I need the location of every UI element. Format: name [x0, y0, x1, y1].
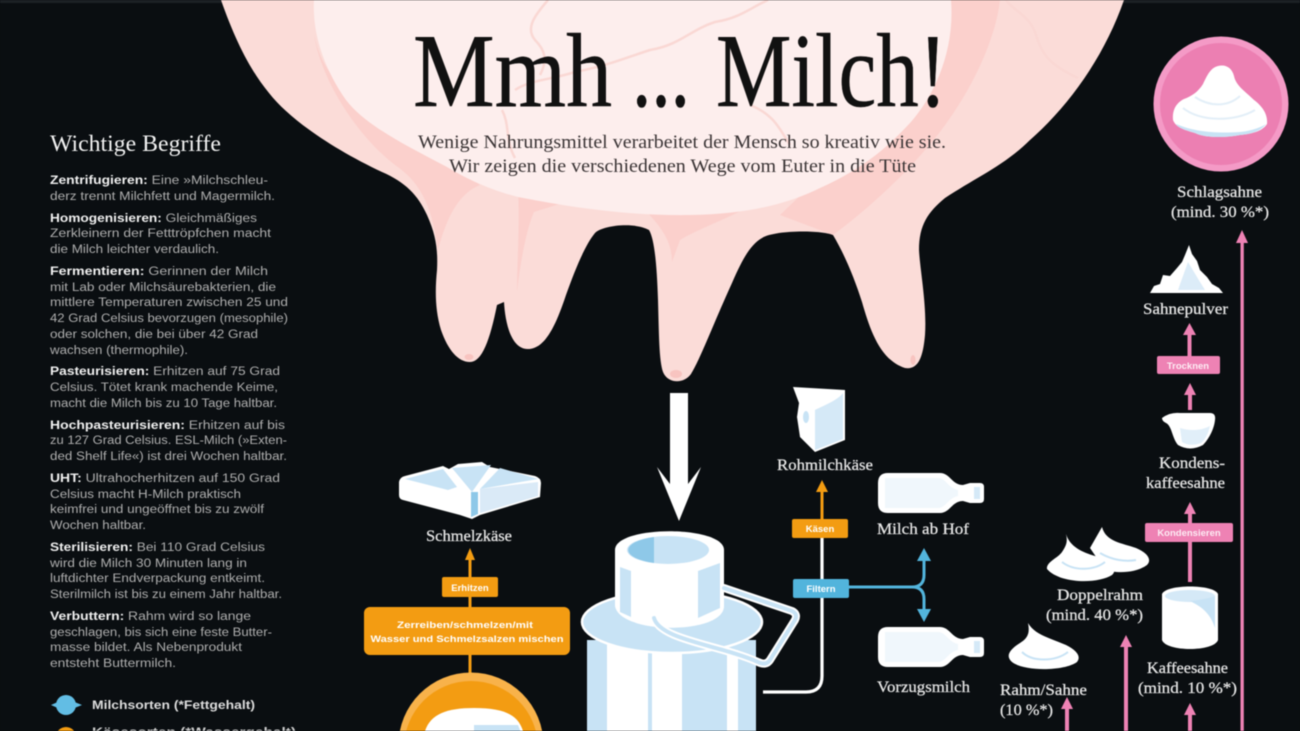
term: UHT: Wochen haltbar.: [50, 520, 146, 532]
subtitle: [418, 132, 946, 177]
icon: whipped cream: [1173, 65, 1267, 137]
term: Fermentieren: Fermentieren: Gerinnen der Milch: [50, 266, 268, 278]
icon: raw milk cheese: [793, 387, 845, 452]
step: Trocknen: [1157, 356, 1220, 374]
arrow: to Rahm/Sahne: [1061, 697, 1073, 731]
milk process: Filtern: [793, 548, 931, 622]
term: Hochpasteurisieren: Hochpasteurisieren: Erhitzen auf bis: [50, 420, 285, 432]
arrow: Kondensieren: [1184, 502, 1196, 582]
step: Käsen: Käsen: [806, 524, 834, 535]
term: Zentrifugieren: Zentrifugieren: Eine »Milchschleu-: [50, 175, 268, 187]
udder veins: [502, 0, 1078, 158]
title: [413, 12, 947, 129]
label: Rahm/Sahne: (10 %*): [1000, 702, 1053, 719]
label: Doppelrahm: [1046, 587, 1143, 624]
can handle: [654, 588, 796, 664]
label: Milch ab Hof: Milch ab Hof: [877, 521, 970, 538]
term: Verbuttern: entsteht Buttermilch.: [50, 658, 176, 670]
term: UHT: Celsius macht H-Milch praktisch: [50, 489, 241, 501]
term: Verbuttern: geschlagen, bis sich eine feste Butter-: [50, 627, 272, 639]
label: Rahm/Sahne: [1000, 682, 1087, 719]
term: Fermentieren: mittlere Temperaturen zwischen 25 und: [50, 297, 288, 309]
arrow: to Kaffeesahne: [1184, 703, 1196, 731]
term: Zentrifugieren: derz trennt Milchfett und Magermilch.: [50, 191, 275, 203]
icon: cream dollop: [1009, 623, 1079, 669]
icon: double cream: [1047, 527, 1149, 581]
can neck: [615, 531, 724, 628]
milk pipe: [763, 537, 822, 692]
can body: [587, 640, 756, 731]
term: Fermentieren: [49, 266, 288, 357]
term: Hochpasteurisieren: zu 127 Grad Celsius. ESL-Milch (»Exten-: [50, 435, 287, 447]
term: Pasteurisieren: Celsius. Tötet krank machende Keime,: [50, 382, 278, 394]
arrow: from udder to milk can: [657, 393, 701, 521]
term: Sterilisieren: [49, 542, 282, 601]
step: Erhitzen: [442, 577, 498, 597]
term: UHT: keimfrei und ungeöffnet bis zu zwölf: [50, 504, 265, 516]
step: Kondensieren: Kondensieren: [1157, 528, 1221, 539]
legend icon: milk types: [51, 695, 82, 715]
term: Homogenisieren: [50, 213, 272, 256]
milk bottle: Milch ab Hof: [877, 473, 984, 538]
icon: bottle: [878, 473, 984, 513]
title: ...: [632, 12, 690, 129]
cheese process: Schmelzkäse: [364, 462, 570, 731]
term: Sterilisieren: Sterilisieren: Bei 110 Grad Celsius: [50, 542, 265, 554]
udder shading bands: [314, 0, 1000, 292]
label: Rohmilchkäse: Rohmilchkäse: [777, 457, 873, 474]
label: Kaffeesahne: (mind. 10 %*): [1138, 680, 1237, 697]
term: Homogenisieren: Zerkleinern der Fetttröpfchen macht: [50, 228, 272, 240]
arrow: to Trocknen: [1184, 383, 1196, 410]
label: Kondenskaffeesahne: kaffeesahne: [1146, 475, 1225, 492]
label: Doppelrahm: (mind. 40 %*): [1046, 607, 1143, 624]
step: Zerreiben: Zerreiben/schmelzen/mit: [397, 620, 534, 631]
label: Vorzugsmilch: Vorzugsmilch: [877, 679, 970, 696]
step: Käsen: [792, 519, 848, 538]
can shoulder: [582, 591, 762, 653]
icon: bottle: [878, 627, 984, 667]
icon: cream powder: [1150, 245, 1223, 293]
badge: cheese circle: [398, 672, 544, 731]
label: Schlagsahne: [1171, 184, 1269, 221]
term: Fermentieren: wachsen (thermophile).: [49, 345, 188, 357]
legend: [51, 695, 296, 731]
term: Verbuttern: [50, 611, 272, 670]
icon: condensed cream cup: [1162, 413, 1215, 448]
subtitle: Wir zeigen die verschiedenen Wege vom Euter in die Tüte: [449, 156, 916, 177]
pink arrow: long to Schlagsahne: [1236, 230, 1248, 731]
step: Zerreiben: [364, 607, 570, 655]
panel: glossary: [49, 131, 288, 670]
label: Doppelrahm: Doppelrahm: [1057, 587, 1143, 604]
label: Sahnepulver: Sahnepulver: [1143, 301, 1229, 318]
term: Hochpasteurisieren: [50, 420, 287, 463]
term: UHT: [50, 473, 280, 532]
legend label: milk types: Milchsorten (*Fettgehalt): [92, 700, 255, 712]
arrow: Käsen up: [816, 480, 828, 520]
term: Pasteurisieren: [50, 366, 280, 410]
cheese process: Rohmilchkäse: [777, 387, 873, 538]
term: Verbuttern: masse bildet. Als Nebenprodukt: [50, 642, 243, 654]
term: Sterilisieren: luftdichter Endverpackung entkeimt.: [50, 573, 265, 585]
label: Schlagsahne: (mind. 30 %*): [1171, 204, 1269, 221]
milk can: [582, 531, 796, 731]
title: Milch!: [716, 12, 947, 129]
term: UHT: UHT: Ultrahocherhitzen auf 150 Grad: [50, 473, 280, 485]
term: Fermentieren: mit Lab oder Milchsäurebakterien, die: [50, 282, 276, 294]
step: Zerreiben: Wasser und Schmelzsalzen mischen: [370, 634, 564, 645]
term: Fermentieren: oder solchen, die bei über 42 Grad: [50, 329, 258, 341]
arrow: to Doppelrahm: [1120, 635, 1132, 731]
term: Verbuttern: Verbuttern: Rahm wird so lange: [50, 611, 251, 623]
term: Pasteurisieren: macht die Milch bis zu 10 Tage haltbar.: [50, 398, 277, 410]
term: Zentrifugieren: [50, 175, 275, 203]
step: Erhitzen: Erhitzen: [451, 583, 489, 594]
udder illustration: [221, 0, 1124, 381]
label: Kondenskaffeesahne: Kondens-: [1159, 455, 1225, 472]
legend icon: cheese types: [56, 727, 76, 731]
term: Sterilisieren: Sterilmilch ist bis zu einem Jahr haltbar.: [50, 589, 282, 601]
term: Homogenisieren: Homogenisieren: Gleichmäßiges: [50, 213, 257, 225]
glossary heading: Wichtige Begriffe: [50, 131, 221, 156]
teat tips: [464, 354, 916, 378]
icon: coffee cream container: [1162, 586, 1218, 649]
blue branch arrows: [848, 548, 931, 622]
title: Mmh: [413, 12, 612, 129]
arrow: to Sahnepulver: [1183, 323, 1196, 356]
label: Kaffeesahne: [1138, 660, 1237, 697]
label: Schlagsahne: Schlagsahne: [1177, 184, 1262, 201]
term: Fermentieren: 42 Grad Celsius bevorzugen (mesophile): [50, 313, 288, 325]
term: Sterilisieren: wird die Milch 30 Minuten lang in: [49, 558, 247, 570]
icon: processed cheese wedges: [399, 462, 541, 519]
label: Kondenskaffeesahne: [1146, 455, 1225, 492]
label: Schmelzkäse: Schmelzkäse: [426, 528, 512, 545]
step: Filtern: Filtern: [806, 584, 836, 595]
subtitle: Wenige Nahrungsmittel verarbeitet der Mensch so kreativ wie sie.: [418, 132, 946, 153]
udder inner highlight: [314, 0, 952, 215]
term: Homogenisieren: die Milch leichter verdaulich.: [50, 244, 219, 256]
arrow: up to Schmelzkäse: [465, 548, 475, 673]
badge: Schlagsahne: [1154, 36, 1288, 172]
label: Rahm/Sahne: Rahm/Sahne: [1000, 682, 1087, 699]
label: Kaffeesahne: Kaffeesahne: [1147, 660, 1228, 677]
milk bottle: Vorzugsmilch: [877, 627, 984, 696]
step: Trocknen: Trocknen: [1167, 361, 1209, 372]
term: Pasteurisieren: Pasteurisieren: Erhitzen auf 75 Grad: [50, 366, 280, 378]
step: Kondensieren: [1145, 523, 1233, 542]
term: Hochpasteurisieren: ded Shelf Life«) ist drei Wochen haltbar.: [50, 451, 287, 463]
